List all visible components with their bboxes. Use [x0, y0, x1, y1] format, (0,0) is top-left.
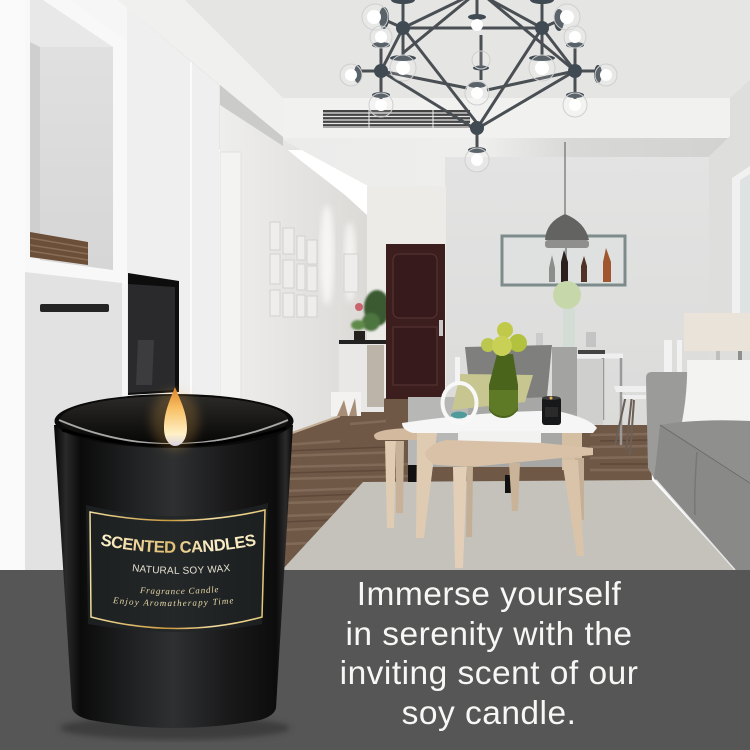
vase with flowers: [481, 322, 527, 418]
wall niche with basket: [25, 0, 127, 285]
console with plant and stool: [331, 290, 390, 416]
black screen: [128, 273, 179, 395]
caption text: soy candle.: [402, 695, 576, 732]
floor lamp shade: [684, 313, 750, 363]
right wall and window: [709, 80, 750, 380]
wall shelf with bottles: [502, 236, 625, 285]
ring ornament: [442, 357, 476, 423]
side table left: [374, 428, 420, 528]
back wall: [445, 157, 710, 425]
miniature candle: [542, 396, 561, 425]
stacked books: [458, 431, 541, 454]
jar rim and interior: [54, 394, 294, 448]
sofa: [646, 360, 750, 570]
bottom grey band: [0, 570, 750, 750]
flame: [151, 387, 199, 450]
white coffee table: [402, 411, 597, 538]
hallway: [367, 186, 446, 406]
caption text: inviting scent of our: [340, 655, 638, 692]
product label: [86, 503, 268, 632]
side wall with picture frames: [220, 105, 367, 433]
rug: [282, 480, 735, 570]
lower wooden table: [425, 440, 593, 568]
door: [386, 244, 445, 399]
dining table, glasses, flower and chairs: [536, 281, 682, 455]
pendant lamp: [545, 142, 589, 248]
cabinet door: [25, 272, 122, 570]
ceiling: [0, 0, 750, 150]
label script line one: Fragrance Candle: [140, 586, 218, 596]
candle jar: [54, 386, 294, 741]
caption text: Immerse yourself: [357, 576, 621, 613]
wood floor: [282, 398, 735, 570]
armchair: [408, 345, 577, 493]
label subtitle: NATURAL SOY WAX: [132, 564, 230, 574]
caption text: in serenity with the: [345, 616, 633, 653]
ceiling soffit with air vent: [283, 98, 730, 186]
chandelier: [340, 0, 617, 172]
label title: SCENTED CANDLES: [101, 534, 256, 553]
caption text: [340, 576, 638, 732]
label script line two: Enjoy Aromatherapy Time: [112, 597, 234, 608]
left cabinet wall: [0, 0, 285, 570]
